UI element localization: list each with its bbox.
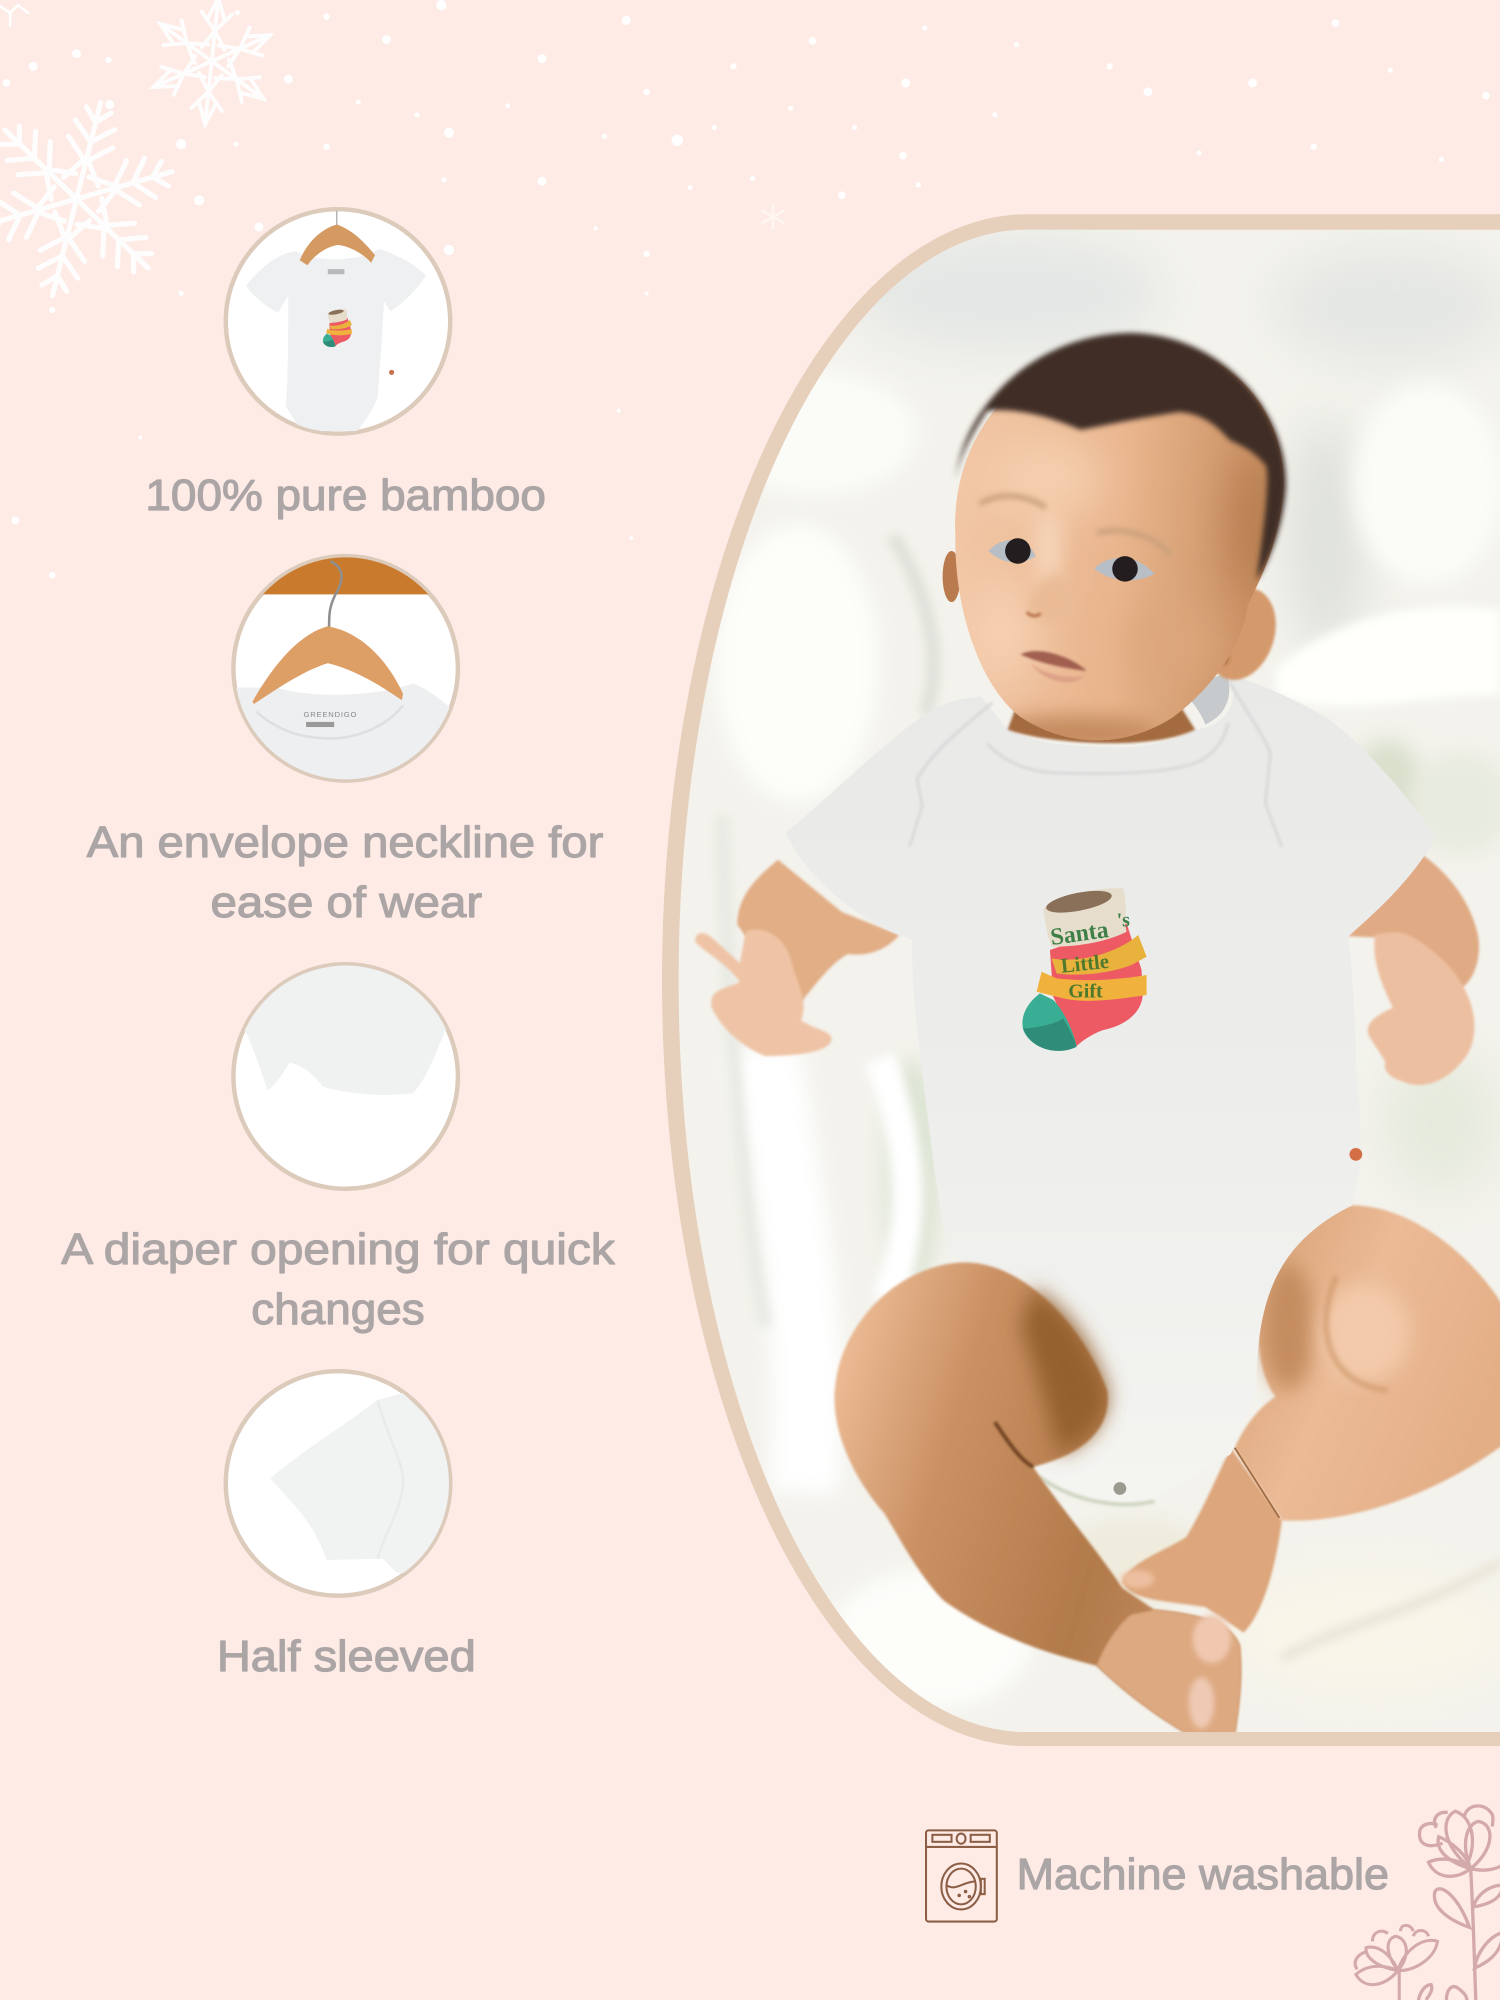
text: 100% pure bamboo: 100% pure bamboo — [145, 472, 546, 520]
hanger hook — [336, 210, 338, 225]
stocking print: Santa — [1049, 917, 1110, 951]
hair — [955, 333, 1286, 580]
right eye — [1094, 556, 1154, 582]
left eye — [989, 538, 1036, 564]
text: envelope neckline: An envelope neckline for — [87, 819, 603, 867]
right ear — [1216, 588, 1278, 682]
nose — [1027, 574, 1082, 622]
baby left hand — [695, 930, 832, 1056]
text: diaper opening — [61, 1226, 615, 1334]
snowflake corner — [0, 5, 28, 26]
feature 4: sleeve thumbnail — [226, 1371, 453, 1596]
onesie neckline — [236, 684, 450, 780]
stocking print — [1022, 887, 1147, 1051]
blanket — [663, 217, 1500, 1747]
snowflake large — [0, 79, 195, 319]
baby left arm — [737, 860, 899, 1008]
panel: baby photo with tan border — [662, 214, 1500, 1747]
text: half sleeved: Half sleeved — [217, 1633, 476, 1681]
stocking print: 's — [1117, 910, 1130, 932]
neck — [1006, 708, 1196, 746]
stocking print: Gift — [1068, 980, 1103, 1002]
face shading — [966, 440, 1282, 751]
text: diaper opening: A diaper opening for quick — [61, 1226, 615, 1274]
onesie — [246, 249, 426, 431]
photo border — [662, 214, 1500, 1746]
feature 2: neckline thumbnail — [230, 548, 462, 791]
baby right leg — [1122, 1205, 1500, 1633]
wooden rail — [263, 557, 428, 594]
feature 1: whole onesie thumbnail — [226, 209, 450, 434]
stocking print — [323, 309, 352, 347]
grey gap by neck — [1192, 676, 1230, 724]
wire hook — [329, 561, 342, 628]
baby right hand — [1368, 932, 1474, 1085]
brand tag — [1349, 1148, 1362, 1161]
text: machine washable: Machine washable — [1017, 1851, 1389, 1899]
eyebrows — [980, 496, 1171, 555]
text: envelope neckline: ease of wear — [210, 879, 482, 927]
crotch shadow — [1040, 1477, 1154, 1504]
onesie bottom — [244, 966, 446, 1095]
text: diaper opening: changes — [251, 1286, 425, 1334]
feature 3: diaper opening thumbnail — [230, 957, 462, 1189]
snap button — [1114, 1482, 1126, 1495]
collar seam — [256, 705, 403, 739]
decoration: big flower — [1418, 1806, 1500, 2000]
left ear — [943, 551, 960, 602]
baby left leg — [834, 1262, 1241, 1737]
onesie body — [786, 673, 1436, 1504]
snow dots — [3, 0, 1490, 578]
brand label — [304, 712, 356, 727]
collar and plackets — [909, 680, 1282, 847]
icon: washing machine — [926, 1830, 997, 1922]
face — [955, 341, 1283, 740]
snowflake small — [143, 0, 281, 131]
text: envelope neckline — [87, 819, 603, 927]
decoration: small flower — [1355, 1925, 1438, 2000]
faint snowflake near photo — [761, 204, 784, 230]
baby head — [943, 333, 1287, 751]
baby right arm — [1348, 852, 1479, 989]
sleeve — [270, 1393, 453, 1575]
brand label: GREENDIGO — [304, 710, 357, 719]
mouth — [1020, 651, 1087, 671]
hanger — [300, 224, 375, 265]
stocking print: Little — [1060, 951, 1110, 978]
label tag — [328, 269, 344, 274]
hanger — [253, 626, 403, 704]
brand tag dot — [389, 370, 394, 375]
